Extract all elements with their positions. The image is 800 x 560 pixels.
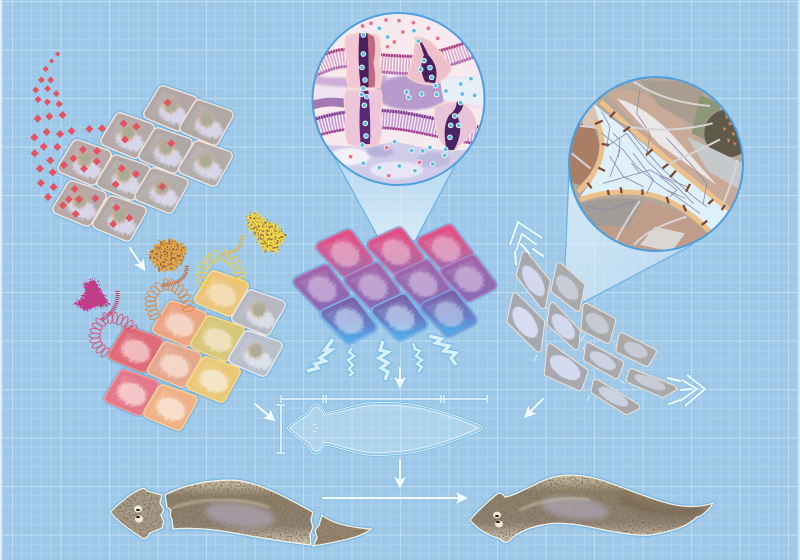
arrow: left cluster to worm outline bbox=[255, 404, 268, 415]
arrow: regeneration, cut worm to whole worm bbox=[323, 497, 458, 499]
stretch chevrons: top-left bbox=[510, 222, 543, 264]
arrow: right cluster to worm outline bbox=[531, 399, 543, 411]
protein: magenta bbox=[74, 279, 110, 311]
eyes bbox=[493, 512, 503, 527]
connective fibres bbox=[534, 306, 625, 401]
tissue patches bbox=[603, 89, 740, 213]
coloured cells bbox=[110, 276, 280, 425]
width dimension bbox=[281, 395, 487, 403]
body fragment bbox=[165, 480, 313, 545]
magnifier: membrane channels bbox=[310, 13, 487, 190]
magnifier: tissue and axons bbox=[568, 77, 752, 260]
height dimension bbox=[276, 405, 285, 453]
stretch chevrons: bottom-right bbox=[668, 375, 705, 406]
arrow: grey cells to coloured cells bbox=[130, 248, 140, 263]
red particles and grey tile cluster bbox=[30, 51, 228, 238]
blueprint worm outline with dimensions bbox=[276, 395, 487, 455]
arrow: cells down to worm outline bbox=[399, 368, 401, 379]
upper membrane bbox=[316, 42, 474, 77]
lower membrane bbox=[313, 110, 487, 145]
magnifier cone: centre bbox=[333, 155, 460, 241]
mid layer bbox=[310, 75, 487, 111]
protein: gold bbox=[246, 212, 287, 252]
magnifier cone: right bbox=[565, 150, 692, 303]
multicoloured tile cluster with proteins bbox=[74, 212, 287, 425]
protein blobs and helices bbox=[74, 212, 287, 358]
helix: red bbox=[89, 291, 138, 358]
channel rods bbox=[587, 112, 725, 225]
nerve channel bbox=[580, 103, 730, 233]
tail fragment bbox=[313, 515, 371, 546]
right stretched tile cluster bbox=[507, 222, 705, 412]
blue ions bbox=[359, 26, 477, 173]
helix: orange bbox=[145, 266, 194, 321]
eyes bbox=[313, 424, 317, 432]
whole regenerated flatworm bbox=[470, 475, 713, 542]
channel proteins bbox=[344, 33, 477, 152]
helix: yellow bbox=[196, 235, 246, 288]
arrow: outline down to worms bbox=[399, 460, 401, 479]
axon fibres bbox=[587, 90, 707, 213]
central purple and pink tile cluster bbox=[299, 230, 491, 339]
tan membrane stripes bbox=[578, 102, 731, 232]
cut flatworm bbox=[110, 480, 371, 546]
stretched cells bbox=[507, 254, 673, 412]
eyes bbox=[134, 505, 143, 523]
protein: orange bbox=[147, 239, 187, 271]
red diamonds bbox=[30, 51, 175, 228]
pink ions bbox=[348, 18, 440, 178]
cytoplasm clouds bbox=[327, 142, 466, 184]
signal zigzags bbox=[307, 336, 456, 380]
head fragment bbox=[110, 488, 164, 539]
nerve strands bbox=[572, 82, 737, 245]
grey cells bbox=[58, 91, 228, 238]
